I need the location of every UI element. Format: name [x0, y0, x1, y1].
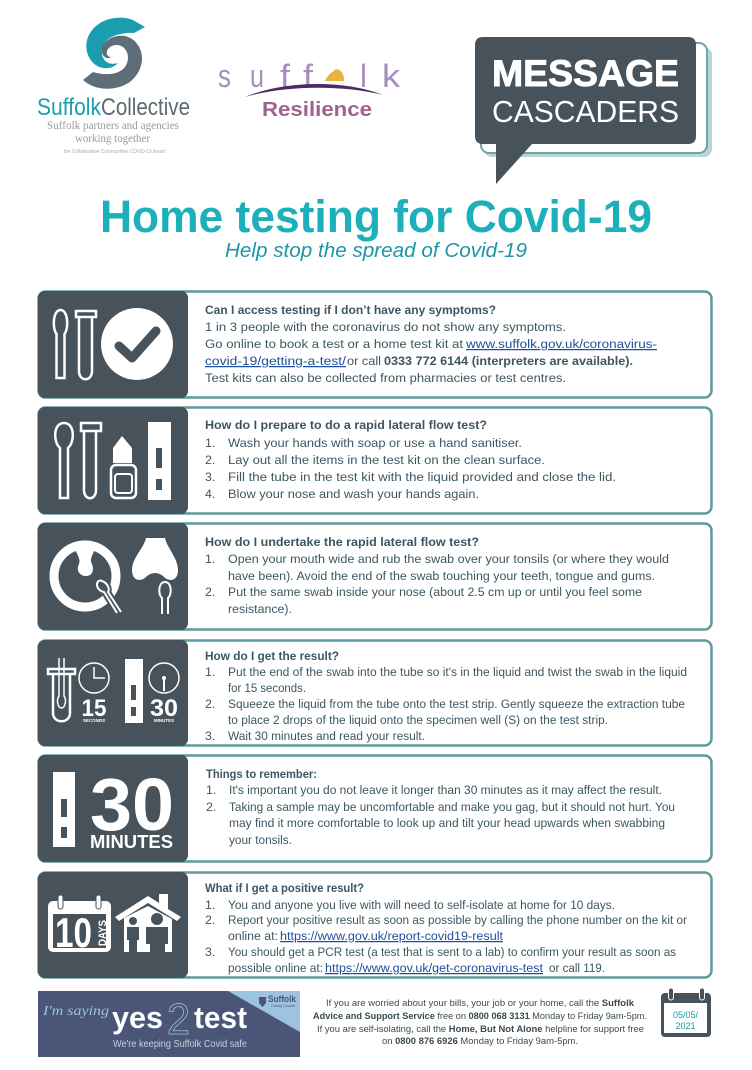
footer support text: If you are self-isolating, call the Home, But Not Alone helpline for support free: [317, 1024, 644, 1035]
logo: Suffolk Resilience: s: [218, 58, 231, 94]
text: get the result: Squeeze the liquid from the tube onto the test strip. Gently squeeze the extraction tube: [228, 697, 685, 711]
icon: calendar date: [661, 988, 711, 1037]
text: prepare: Blow your nose and wash your hands again.: [228, 487, 479, 501]
icon: test strip and 30 minutes: 30: [90, 763, 174, 846]
panel: prepare: [38, 407, 712, 514]
panel: positive result: [38, 872, 712, 978]
logo: Suffolk Collective: Suffolk partners and agencies: [47, 120, 179, 132]
banner: yes 2 test: I'm saying: [42, 1004, 109, 1019]
icon: tube, strip and timers: [48, 658, 179, 723]
text: prepare: Fill the tube in the test kit with the liquid provided and close the lid.: [228, 470, 616, 484]
text: things to remember: 1.: [206, 783, 216, 797]
text: undertake: 2.: [205, 585, 215, 599]
footer support text: Advice and Support Service free on 0800 068 3131 Monday to Friday 9am-5pm.: [313, 1011, 647, 1022]
logo: Suffolk Resilience: l: [360, 58, 367, 94]
text: things to remember: [206, 767, 675, 847]
text: things to remember: It's important you do not leave it longer than 30 minutes as it may affect the result.: [229, 783, 662, 797]
text: prepare: 1.: [205, 436, 215, 450]
text: positive result: https://www.gov.uk/get-coronavirus-test: [325, 961, 544, 975]
text: positive result: online at:: [228, 929, 278, 943]
text: undertake: Open your mouth wide and rub the swab over your tonsils (or where they would: [228, 552, 669, 566]
text: get the result: 2.: [205, 697, 215, 711]
text: undertake: Put the same swab inside your nose (about 2.5 cm up or until you feel some: [228, 585, 642, 599]
text: get the result: for 15 seconds.: [228, 681, 306, 695]
logo: Message Cascaders speech bubble: [475, 37, 712, 184]
text: positive result: What if I get a positive result?: [205, 881, 364, 895]
icon: mouth and nose swab: [54, 538, 178, 614]
text: get the result: Wait 30 minutes and read your result.: [228, 729, 425, 743]
text: get the result: 3.: [205, 729, 215, 743]
banner: yes 2 test: [38, 991, 300, 1057]
text: prepare: How do I prepare to do a rapid lateral flow test?: [205, 418, 487, 432]
panel: get the result: [38, 640, 712, 746]
text: things to remember: your tonsils.: [229, 833, 292, 847]
icon: calendar date: 05/05/: [673, 1010, 699, 1020]
text: positive result: You should get a PCR test (a test that is sent to a lab) to confirm your result as soon as: [228, 945, 676, 959]
icon: 10 days calendar and house: [48, 894, 181, 956]
text: prepare: Lay out all the items in the test kit on the clean surface.: [228, 453, 545, 467]
text: positive result: or call 119.: [549, 961, 605, 975]
logo: Suffolk Collective: Collective: [101, 94, 190, 121]
logo: Suffolk Collective: [37, 18, 190, 155]
text: undertake: [205, 535, 669, 616]
text: positive result: 2.: [205, 913, 215, 927]
logo: Suffolk Resilience: u: [250, 58, 264, 94]
text: access testing: Test kits can also be collected from pharmacies or test centres.: [205, 371, 566, 385]
banner: yes 2 test: 2: [167, 995, 190, 1044]
logo: Message Cascaders speech bubble: MESSAGE: [492, 53, 679, 94]
icon: test strip and 30 minutes: MINUTES: [90, 832, 173, 852]
banner: yes 2 test: County Council: [271, 1003, 295, 1008]
text: things to remember: Taking a sample may be uncomfortable and make you gag, but it should not hurt. You: [229, 800, 675, 814]
text: positive result: Report your positive result as soon as possible by calling the phone number on the kit or: [228, 913, 687, 927]
text: access testing: Can I access testing if I don’t have any symptoms?: [205, 303, 496, 317]
text: undertake: 1.: [205, 552, 215, 566]
icon: swab tube and tick: [54, 308, 173, 380]
title: Home testing for Covid-19: [100, 191, 652, 242]
text: things to remember: Things to remember:: [206, 767, 317, 781]
icon: tube, strip and timers: SECONDS: [83, 718, 105, 723]
logo: Suffolk Resilience: f: [303, 58, 313, 94]
text: positive result: https://www.gov.uk/report-covid19-result: [280, 929, 504, 943]
text: undertake: How do I undertake the rapid lateral flow test?: [205, 535, 479, 549]
text: undertake: resistance).: [228, 602, 292, 616]
logo: Suffolk Resilience: f: [280, 58, 290, 94]
logo: Suffolk Collective: the Collaborative Communities COVID-19 board: [64, 149, 165, 155]
footer support text: on 0800 876 6926 Monday to Friday 9am-5pm.: [382, 1036, 578, 1047]
text: things to remember: 2.: [206, 800, 216, 814]
text: prepare: 2.: [205, 453, 215, 467]
text: access testing: 0333 772 6144 (interpreters are available).: [384, 354, 633, 368]
text: get the result: How do I get the result?: [205, 649, 339, 663]
panel: access testing: [38, 291, 712, 398]
icon: tube, strip and timers: MINUTES: [154, 718, 174, 723]
icon: 10 days calendar and house: DAYS: [97, 920, 109, 946]
banner: yes 2 test: We're keeping Suffolk Covid safe: [113, 1039, 247, 1050]
icon: test strip and 30 minutes: [53, 763, 174, 852]
text: undertake: have been). Avoid the end of the swab touching your teeth, tongue and gums.: [228, 569, 655, 583]
logo: Suffolk Resilience: [218, 58, 401, 121]
text: access testing: [205, 303, 657, 385]
logo: Message Cascaders speech bubble: CASCADERS: [492, 94, 679, 129]
icon: tube, strip and timers: 15: [82, 695, 106, 722]
logo: Suffolk Collective: Suffolk: [37, 94, 102, 121]
text: get the result: 1.: [205, 665, 215, 679]
text: prepare: [205, 418, 616, 501]
text: things to remember: may find it more comfortable to look up and tilt your head upwards when swabbing: [229, 816, 665, 830]
text: prepare: 3.: [205, 470, 215, 484]
logo: Suffolk Collective: working together: [75, 133, 150, 145]
text: get the result: [205, 649, 687, 743]
icon: tube, strip and timers: 30: [150, 695, 178, 722]
text: positive result: 1.: [205, 898, 215, 912]
panel: things to remember: [38, 755, 712, 862]
text: prepare: 4.: [205, 487, 215, 501]
text: get the result: Put the end of the swab into the tube so it's in the liquid and twist the swab in the liquid: [228, 665, 687, 679]
banner: yes 2 test: yes: [112, 1000, 163, 1035]
icon: calendar date: 2021: [675, 1021, 696, 1031]
footer support text: [313, 998, 647, 1047]
banner: yes 2 test: test: [194, 1000, 247, 1035]
text: positive result: 3.: [205, 945, 215, 959]
text: access testing: Go online to book a test or a home test kit at: [205, 337, 464, 351]
banner: yes 2 test: Suffolk: [268, 994, 297, 1004]
subtitle: Help stop the spread of Covid-19: [225, 240, 527, 262]
text: prepare: Wash your hands with soap or use a hand sanitiser.: [228, 436, 522, 450]
text: positive result: possible online at:: [228, 961, 323, 975]
logo: Suffolk Resilience: k: [382, 58, 401, 94]
text: get the result: to place 2 drops of the liquid onto the specimen well (S) on the test strip.: [228, 713, 608, 727]
text: access testing: or call: [347, 354, 381, 368]
text: access testing: covid-19/getting-a-test/: [205, 354, 347, 368]
text: positive result: [205, 881, 687, 975]
logo: Suffolk Resilience: Resilience: [262, 99, 372, 121]
icon: 10 days calendar and house: 10: [55, 909, 92, 956]
panel: undertake: [38, 523, 712, 630]
text: positive result: You and anyone you live with will need to self-isolate at home for 10 days.: [228, 898, 615, 912]
icon: test kit items: [55, 422, 171, 500]
text: access testing: 1 in 3 people with the coronavirus do not show any symptoms.: [205, 320, 566, 334]
text: access testing: www.suffolk.gov.uk/coronavirus-: [465, 337, 657, 351]
footer support text: If you are worried about your bills, your job or your home, call the Suffolk: [326, 998, 635, 1009]
